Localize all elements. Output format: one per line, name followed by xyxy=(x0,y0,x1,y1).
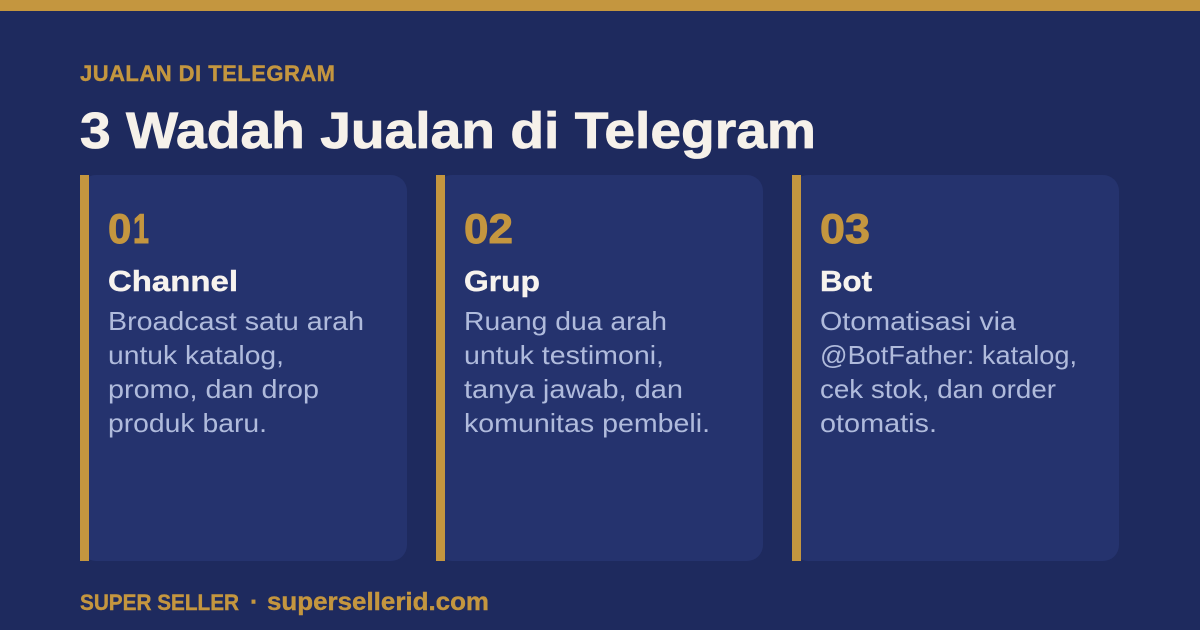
footer brand line xyxy=(80,588,489,616)
card description xyxy=(464,306,710,438)
footer brand line: SUPER SELLER xyxy=(80,590,239,615)
card number xyxy=(108,205,149,252)
card background xyxy=(80,175,407,561)
card description: produk baru. xyxy=(108,408,267,438)
card description: @BotFather: katalog, xyxy=(820,340,1077,370)
card description: promo, dan drop xyxy=(108,374,319,404)
card accent bar xyxy=(80,175,89,561)
card background xyxy=(436,175,763,561)
card description: tanya jawab, dan xyxy=(464,374,683,404)
title: 3 Wadah Jualan di Telegram xyxy=(80,102,816,159)
card description: cek stok, dan order xyxy=(820,374,1056,404)
card description: Ruang dua arah xyxy=(464,306,667,336)
card accent bar xyxy=(436,175,445,561)
top accent bar xyxy=(0,0,1200,11)
card description: otomatis. xyxy=(820,408,937,438)
card description: komunitas pembeli. xyxy=(464,408,710,438)
card heading: Grup xyxy=(464,266,540,298)
card number: 1 xyxy=(133,205,149,252)
footer brand line: · xyxy=(250,588,258,616)
card heading: Bot xyxy=(820,266,872,298)
eyebrow heading: JUALAN DI TELEGRAM xyxy=(80,61,335,86)
panel: bot xyxy=(792,175,1119,561)
card description xyxy=(820,306,1077,438)
card number: 02 xyxy=(464,205,513,252)
panel: channel xyxy=(80,175,407,561)
card number: 03 xyxy=(820,205,870,252)
footer brand line: supersellerid.com xyxy=(267,588,489,616)
card accent bar xyxy=(792,175,801,561)
panel: grup xyxy=(436,175,763,561)
card description: Otomatisasi via xyxy=(820,306,1017,336)
card description xyxy=(108,306,364,438)
card number: 0 xyxy=(108,205,131,252)
card description: untuk katalog, xyxy=(108,340,284,370)
card description: untuk testimoni, xyxy=(464,340,664,370)
card heading: Channel xyxy=(108,266,238,298)
card description: Broadcast satu arah xyxy=(108,306,364,336)
card background xyxy=(792,175,1119,561)
